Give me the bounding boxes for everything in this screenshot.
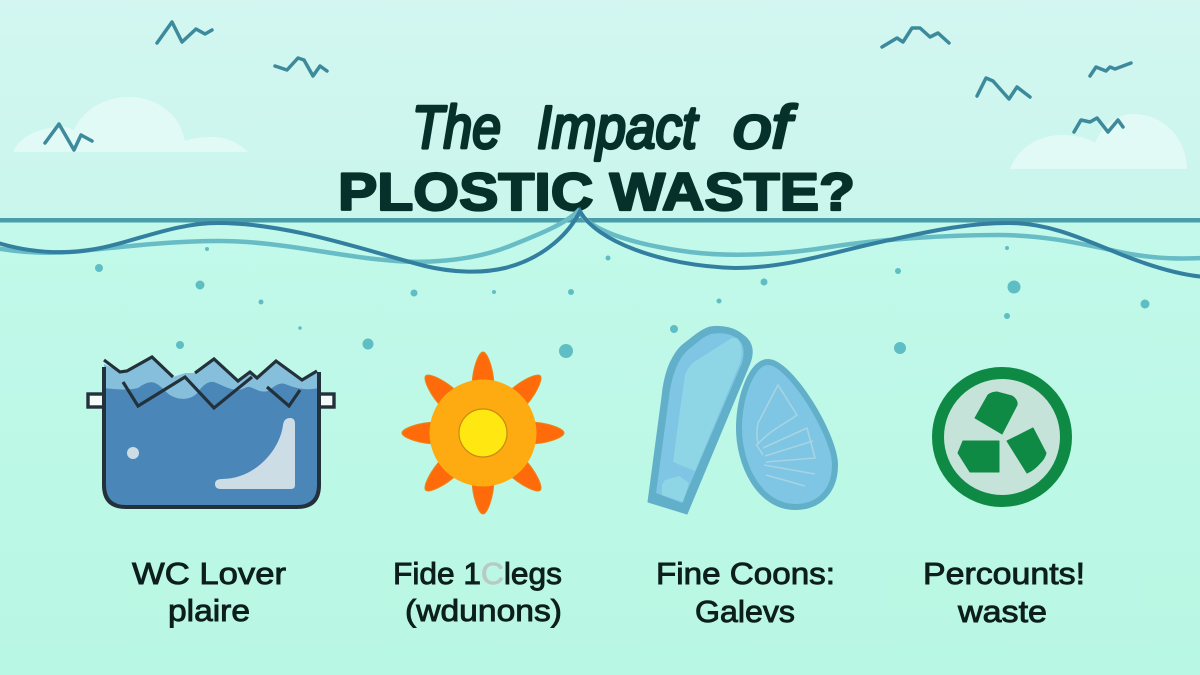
label: column 4: Percounts! (923, 556, 1085, 591)
pot handles (88, 394, 104, 407)
label: column 3 (656, 556, 835, 629)
title line 2: PLOSTIC WASTE? (338, 163, 855, 222)
cloud: top left (13, 97, 248, 152)
pot highlights (215, 418, 295, 489)
cloud: top right (1010, 114, 1187, 169)
label: column 1 (132, 556, 286, 628)
waves (0, 211, 1200, 277)
birds (45, 22, 1131, 150)
label: column 3: Galevs (695, 594, 795, 629)
label: column 2: (wdunons) (405, 593, 562, 628)
label: column 2: Fide 1Clegs (393, 556, 562, 591)
label: column 4 (923, 556, 1085, 629)
title line 1 (412, 94, 797, 161)
light water (104, 357, 317, 400)
label: column 4: waste (957, 594, 1047, 629)
waterline (0, 218, 1200, 222)
bubbles (95, 246, 1150, 358)
pot water (104, 382, 319, 507)
icon: sun (402, 352, 564, 514)
title line 1: Impact (537, 94, 699, 161)
bottle (648, 326, 752, 514)
shell (739, 362, 835, 507)
shell ridges (756, 385, 815, 486)
title line 1: of (733, 94, 797, 161)
label: column 3: Fine Coons: (656, 556, 835, 591)
pot jagged lines (104, 357, 317, 408)
icon: recycling symbol (938, 373, 1066, 501)
label: column 1: plaire (168, 593, 250, 628)
title line 1: The (412, 94, 501, 161)
pot outline (104, 367, 319, 507)
icon: plastic bottle and shell (648, 326, 835, 514)
label: column 1: WC Lover (132, 556, 286, 591)
label: column 2 (393, 556, 562, 628)
title (338, 94, 855, 222)
icon: pot of water (88, 357, 334, 507)
